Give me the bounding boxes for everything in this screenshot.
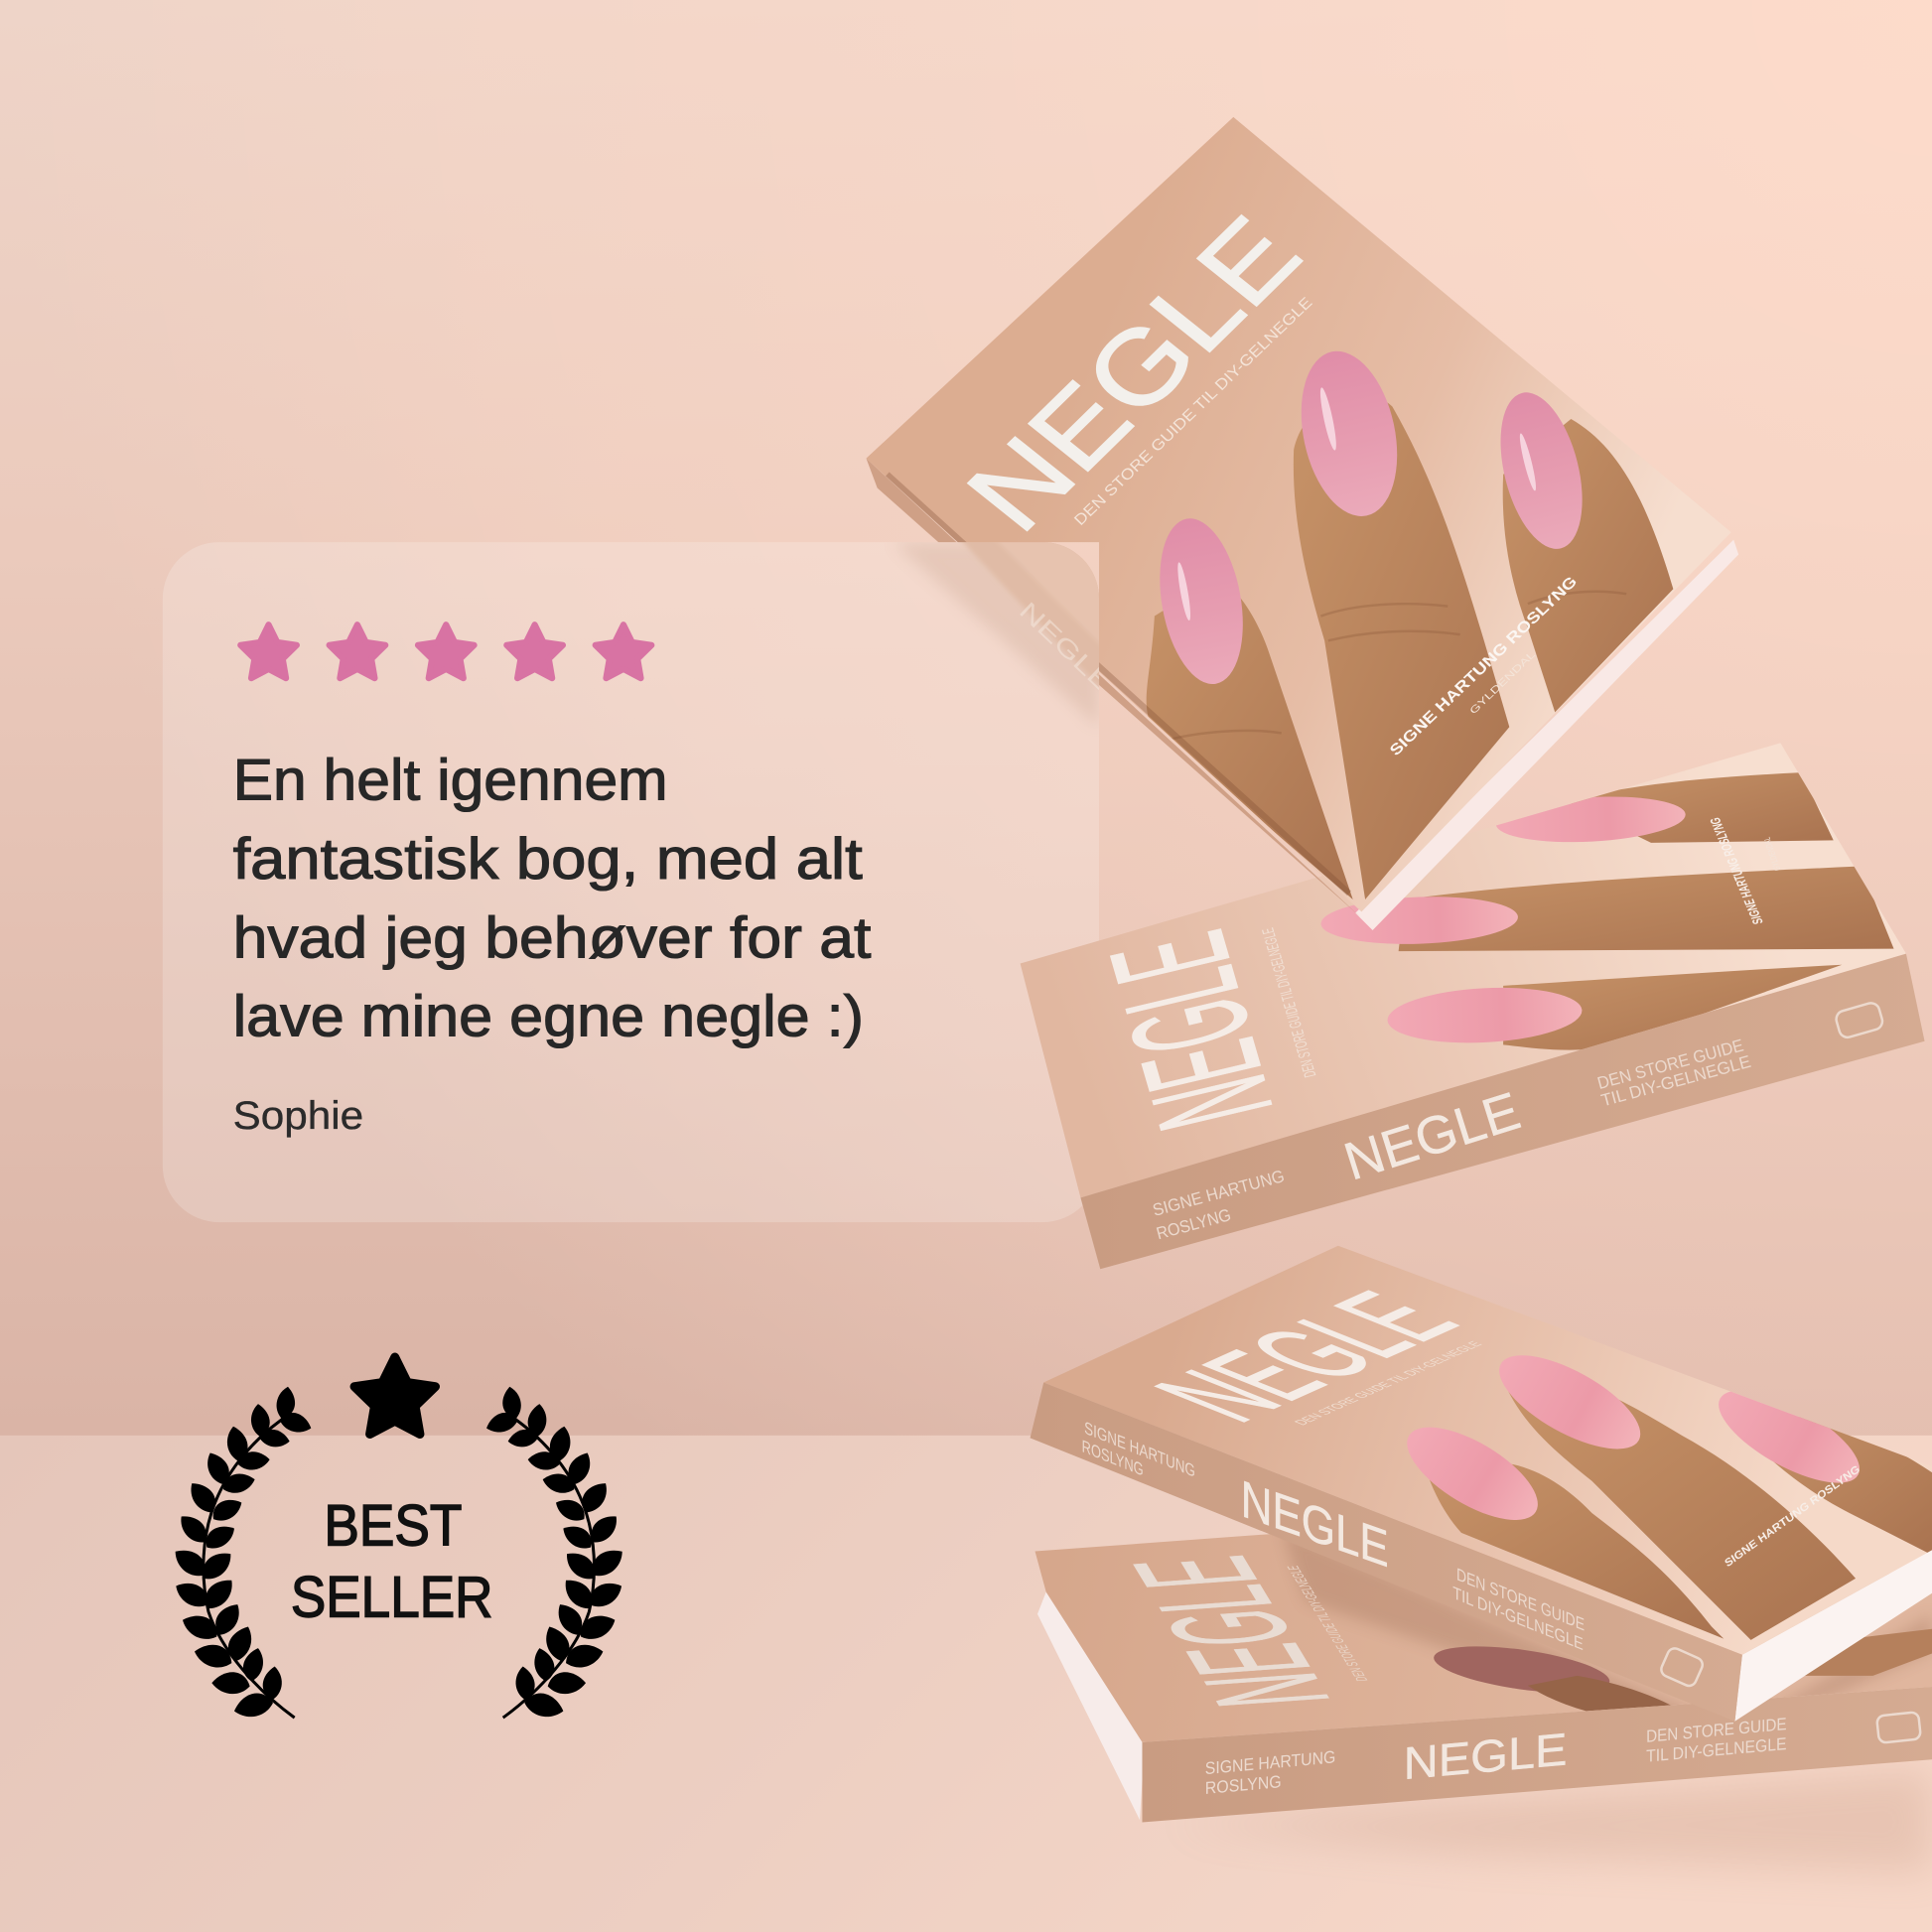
badge text: BEST xyxy=(324,1493,462,1558)
cover publisher: GYLDENDAL xyxy=(1468,649,1539,717)
spine text: ROSLYNG xyxy=(1082,1437,1144,1480)
page edge xyxy=(1037,1591,1145,1820)
icon: right laurel xyxy=(483,1385,627,1721)
spine xyxy=(1142,1687,1932,1823)
finger 3 xyxy=(1503,965,1842,1050)
panel background xyxy=(163,542,1099,1222)
nail 1 xyxy=(1496,796,1686,842)
cover xyxy=(1021,743,1906,1197)
cover photo details xyxy=(1285,1541,1932,1712)
publisher logo xyxy=(1876,1712,1921,1743)
best seller badge xyxy=(170,1357,627,1721)
cover title: NEGLE xyxy=(942,196,1324,552)
page edge xyxy=(1355,540,1738,930)
nail 1 xyxy=(1408,1428,1538,1520)
badge text: SELLER xyxy=(291,1565,492,1629)
finger 1 xyxy=(1147,579,1353,899)
review panel xyxy=(163,542,1099,1222)
book 1 portion behind the glass panel: NEGLE xyxy=(1014,598,1117,697)
finger 2 xyxy=(1294,394,1509,899)
cover photo xyxy=(888,343,1673,899)
star rating xyxy=(240,624,651,678)
cover xyxy=(866,117,1731,911)
book 2: floating xyxy=(1021,743,1925,1269)
finger 3 xyxy=(1503,419,1673,712)
icon: left laurel xyxy=(170,1385,314,1721)
spine title: NEGLE xyxy=(1404,1725,1568,1790)
cover author: SIGNE HARTUNG ROSLYNG xyxy=(1724,1463,1862,1570)
finger 1 xyxy=(1565,772,1834,843)
spine text: SIGNE HARTUNG xyxy=(1205,1746,1335,1778)
spine xyxy=(1080,954,1925,1269)
spine text: ROSLYNG xyxy=(1205,1771,1282,1798)
cover xyxy=(1035,1528,1932,1742)
cover author: SIGNE HARTUNG ROSLYNG xyxy=(1387,573,1581,759)
background light glow xyxy=(0,0,1932,1437)
knuckle creases xyxy=(1171,592,1626,740)
background wall xyxy=(0,0,1932,1437)
nail 3 xyxy=(1486,384,1596,557)
review quote xyxy=(233,748,871,1049)
nail highlights xyxy=(1175,386,1539,621)
cover photo xyxy=(1320,772,1894,1050)
finger 1 xyxy=(1427,1462,1724,1639)
icon: star xyxy=(354,1357,436,1435)
spine text: TIL DIY-GELNEGLE xyxy=(1598,1051,1753,1110)
nail 2 xyxy=(1499,1355,1640,1449)
review quote: fantastisk bog, med alt xyxy=(233,827,863,892)
finger 2 xyxy=(1399,866,1894,951)
cover photo xyxy=(1393,1337,1932,1640)
cover xyxy=(1043,1246,1932,1655)
spine text: DEN STORE GUIDE xyxy=(1595,1035,1745,1093)
shadow from upper book xyxy=(1285,1541,1932,1706)
finger 2 xyxy=(1508,1387,1856,1640)
cover title: NEGLE xyxy=(1122,1278,1489,1436)
spine text: TIL DIY-GELNEGLE xyxy=(1452,1583,1584,1654)
cover subtitle: DEN STORE GUIDE TIL DIY-GELNEGLE xyxy=(1259,926,1319,1079)
spine crease xyxy=(888,475,1349,894)
spine title: NEGLE xyxy=(1241,1469,1389,1579)
spine text: SIGNE HARTUNG xyxy=(1084,1418,1195,1481)
spine text xyxy=(1082,1418,1585,1654)
review quote: lave mine egne negle :) xyxy=(233,985,864,1049)
spine text: ROSLYNG xyxy=(1154,1204,1233,1243)
book 4: bottom of stack xyxy=(1035,1528,1932,1823)
publisher logo xyxy=(1659,1646,1705,1688)
spine text: DEN STORE GUIDE xyxy=(1646,1714,1787,1746)
cover title: NEGLE xyxy=(1076,918,1308,1143)
spine text xyxy=(1205,1714,1787,1798)
book 1 portion behind the glass panel xyxy=(902,542,1099,719)
publisher logo xyxy=(1835,1001,1884,1039)
review quote: En helt igennem xyxy=(233,748,668,812)
spine text: TIL DIY-GELNEGLE xyxy=(1646,1733,1787,1766)
cover subtitle: DEN STORE GUIDE TIL DIY-GELNEGLE xyxy=(1292,1340,1486,1427)
book 1: floating top xyxy=(866,117,1738,930)
nail 3 xyxy=(1388,987,1583,1042)
spine text xyxy=(1151,1035,1753,1243)
cover title: NEGLE xyxy=(1098,1551,1365,1712)
spine xyxy=(1031,1382,1742,1722)
cover publisher: GYLDENDAL xyxy=(1761,836,1782,872)
spine text: SIGNE HARTUNG xyxy=(1151,1166,1287,1220)
page block xyxy=(1734,1550,1932,1722)
spine title: NEGLE xyxy=(1337,1082,1527,1191)
nail 1 xyxy=(1148,512,1255,691)
finger 3 xyxy=(1773,1417,1932,1553)
book 3: leaning on stack xyxy=(1031,1246,1932,1722)
cover subtitle: DEN STORE GUIDE TIL DIY-GELNEGLE xyxy=(1285,1565,1372,1682)
cover author: SIGNE HARTUNG ROSLYNG xyxy=(1707,816,1766,925)
reviewer name: Sophie xyxy=(233,1094,363,1138)
cover subtitle: DEN STORE GUIDE TIL DIY-GELNEGLE xyxy=(1071,295,1315,529)
background floor xyxy=(0,1436,1932,1932)
badge text xyxy=(291,1493,492,1629)
floor shadow xyxy=(1171,1769,1932,1872)
spine text: DEN STORE GUIDE xyxy=(1456,1565,1585,1635)
nail 3 xyxy=(1719,1392,1860,1483)
nail 2 xyxy=(1320,897,1518,944)
review quote: hvad jeg behøver for at xyxy=(233,905,871,970)
spine xyxy=(866,459,1361,918)
nail 2 xyxy=(1288,343,1411,525)
